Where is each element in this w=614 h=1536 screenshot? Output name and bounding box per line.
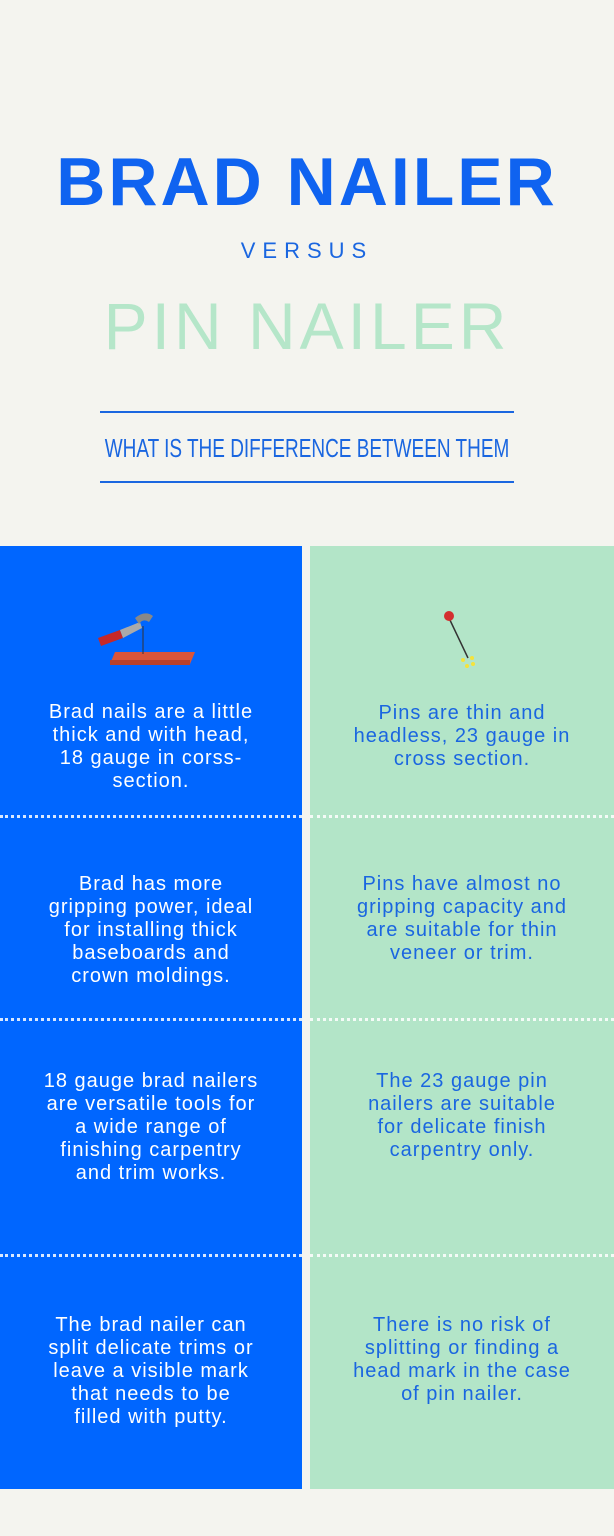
text: pin 2: are suitable for thin [366, 919, 558, 941]
text: pin 4: splitting or finding a [365, 1337, 559, 1359]
text: brad 2: for installing thick [64, 919, 238, 941]
text: brad 3: 18 gauge brad nailers [44, 1070, 258, 1092]
subtitle with rules [100, 411, 514, 483]
text: pin 1: cross section. [394, 748, 530, 770]
text: brad 2: crown moldings. [71, 965, 231, 987]
text: pin 3: for delicate finish [377, 1116, 547, 1138]
text: brad 4: that needs to be [71, 1383, 231, 1405]
text: brad 1: Brad nails are a little [49, 701, 253, 723]
text: brad 4: filled with putty. [74, 1406, 228, 1428]
text: pin 4: of pin nailer. [401, 1383, 523, 1405]
icon: pin [444, 611, 475, 668]
text: brad 1: 18 gauge in corss- [60, 747, 242, 769]
versus: VERSUS [241, 238, 373, 263]
text: brad 2: gripping power, ideal [49, 896, 253, 918]
text: brad 1: thick and with head, [53, 724, 249, 746]
panel: brad nailer [0, 546, 302, 1489]
panel: pin nailer [310, 546, 614, 1489]
text: pin 2: veneer or trim. [390, 942, 534, 964]
text: pin 2 [357, 873, 567, 964]
text: brad 2: baseboards and [72, 942, 230, 964]
text: pin 1: Pins are thin and [378, 702, 546, 724]
text: brad 2: Brad has more [79, 873, 223, 895]
text: pin 4: head mark in the case [353, 1360, 571, 1382]
text: pin 2: Pins have almost no [362, 873, 562, 895]
text: pin 3 [368, 1070, 556, 1161]
text: pin 4 [353, 1314, 571, 1405]
text: brad 3 [44, 1070, 258, 1184]
text: pin 3: carpentry only. [390, 1139, 534, 1161]
text: brad 4: leave a visible mark [53, 1360, 249, 1382]
text: pin 3: nailers are suitable [368, 1093, 556, 1115]
text: brad 3: a wide range of [75, 1116, 227, 1138]
text: pin 3: The 23 gauge pin [376, 1070, 548, 1092]
text: brad 3: and trim works. [76, 1162, 226, 1184]
text: brad 1: section. [113, 770, 189, 792]
text: brad 3: finishing carpentry [60, 1139, 242, 1161]
text: brad 3: are versatile tools for [47, 1093, 255, 1115]
text: pin 1 [354, 702, 570, 770]
title: BRAD NAILER [56, 144, 558, 220]
subtitle with rules: WHAT IS THE DIFFERENCE BETWEEN THEM [105, 433, 509, 463]
text: pin 2: gripping capacity and [357, 896, 567, 918]
text: pin 4: There is no risk of [373, 1314, 551, 1336]
text: brad 4 [48, 1314, 254, 1428]
text: brad 4: split delicate trims or [48, 1337, 254, 1359]
text: brad 1 [49, 701, 253, 792]
text: brad 4: The brad nailer can [55, 1314, 247, 1336]
text: brad 2 [49, 873, 253, 987]
pin nailer heading: PIN NAILER [104, 289, 510, 363]
icon: hammer [98, 613, 195, 665]
text: pin 1: headless, 23 gauge in [354, 725, 570, 747]
